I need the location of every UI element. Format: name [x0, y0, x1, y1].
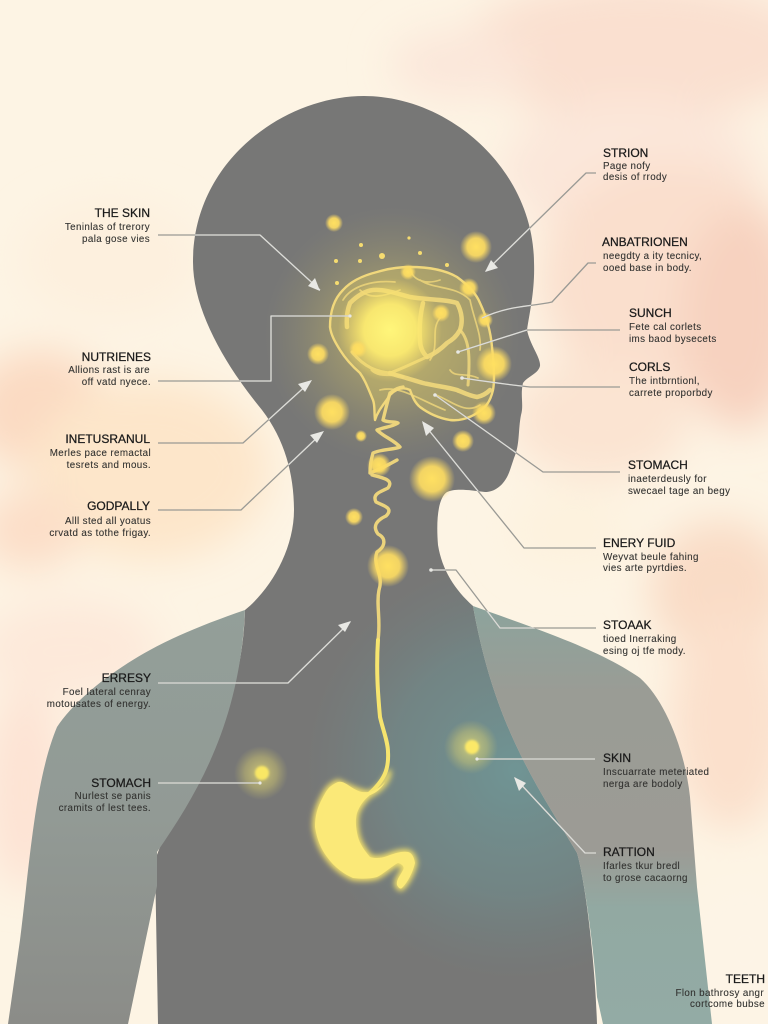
right arm — [473, 606, 712, 1024]
label: nutrienes: off vatd nyece. — [82, 377, 151, 388]
arm energy point left — [234, 746, 288, 800]
label: erresy: Foel Iateral cenray — [63, 687, 151, 698]
label: nutrienes — [68, 350, 151, 388]
label: teeth: Flon bathrosy angr — [675, 988, 764, 999]
label: corls: The intbrntionl, — [629, 376, 700, 387]
label: inetusranul: INETUSRANUL — [65, 432, 150, 446]
label: sunch: Fete cal corlets — [629, 322, 702, 333]
label: skin: Inscuarrate meteriated — [603, 767, 709, 778]
label: strion: desis of rrody — [603, 172, 667, 183]
label: skin — [603, 751, 709, 790]
label: stomach right: inaeterdeusly for — [628, 474, 707, 485]
label: sunch — [629, 306, 717, 345]
label: godpally — [49, 499, 151, 539]
left arm — [8, 610, 245, 1024]
label: stomach right — [628, 458, 730, 497]
label: godpally: Alll sted all yoatus — [65, 516, 151, 527]
label: teeth: cortcome bubse — [690, 999, 765, 1010]
label: erresy — [47, 671, 151, 710]
label: inetusranul — [50, 432, 151, 471]
arrowheads — [258, 260, 526, 791]
label: enery fuid: Weyvat beule fahing — [603, 552, 699, 563]
label: inetusranul: tesrets and mous. — [67, 460, 151, 471]
label: anbatrionen: neegdty a ity tecnicy, — [603, 251, 702, 262]
label: stoaak: STOAAK — [603, 618, 651, 632]
label: ration: RATTION — [603, 845, 655, 859]
leader lines on background — [158, 173, 620, 853]
label: nutrienes: NUTRIENES — [82, 350, 151, 364]
label: erresy: motousates of energy. — [47, 699, 151, 710]
glow around brain — [290, 233, 494, 438]
brain folds — [347, 290, 462, 357]
label: ration: Ifarles tkur bredl — [603, 861, 680, 872]
label: teeth: TEETH — [726, 972, 765, 986]
label: godpally: crvatd as tothe frigay. — [49, 528, 151, 539]
label: sunch: ims baod bysecets — [629, 334, 717, 345]
label: the skin: Teninlas of trerory — [65, 222, 150, 233]
label: anbatrionen: ooed base in body. — [603, 263, 692, 274]
label: godpally: GODPALLY — [87, 499, 150, 513]
stomach glow — [315, 772, 415, 889]
label: the skin: THE SKIN — [95, 206, 150, 220]
brain network — [330, 267, 494, 640]
label: strion: STRION — [603, 146, 648, 160]
label: stomach left: STOMACH — [91, 776, 151, 790]
label: corls: CORLS — [629, 360, 670, 374]
digestive tract and stomach — [315, 640, 415, 889]
label: enery fuid: vies arte pyrtdies. — [603, 563, 687, 574]
teal torso shading — [362, 606, 590, 926]
label: ration: to grose cacaorng — [603, 873, 688, 884]
label: corls — [629, 360, 713, 399]
label: stoaak: esing oj tfe mody. — [603, 646, 686, 657]
label: stomach left: cramits of lest tees. — [59, 803, 151, 814]
label: ration — [603, 845, 688, 884]
stomach — [315, 782, 415, 889]
label: stomach right: swecael tage an begy — [628, 486, 730, 497]
label: erresy: ERRESY — [102, 671, 151, 685]
label: stomach left — [59, 776, 151, 814]
glowing energy orbs — [307, 214, 512, 587]
esophagus — [370, 640, 388, 793]
brain stem — [370, 387, 403, 640]
label: stoaak: tioed Inerraking — [603, 634, 677, 645]
label: stomach right: STOMACH — [628, 458, 688, 472]
label: anbatrionen — [602, 235, 702, 274]
arm energy point right — [444, 720, 498, 774]
label: strion: Page nofy — [603, 161, 651, 172]
label: inetusranul: Merles pace remactal — [50, 448, 151, 459]
label: the skin — [65, 206, 150, 245]
label: strion — [603, 146, 667, 183]
head and torso — [155, 96, 597, 1024]
label: sunch: SUNCH — [629, 306, 672, 320]
leader lines over body — [158, 228, 596, 854]
label: stomach left: Nurlest se panis — [75, 791, 151, 802]
label: teeth — [675, 972, 765, 1010]
label: nutrienes: Allions rast is are — [68, 365, 150, 376]
central brain core — [338, 278, 442, 382]
label: the skin: pala gose vies — [82, 234, 150, 245]
label: anbatrionen: ANBATRIONEN — [602, 235, 688, 249]
label: skin: SKIN — [603, 751, 631, 765]
label: enery fuid: ENERY FUID — [603, 536, 676, 550]
label: stoaak — [603, 618, 686, 657]
brain outline — [330, 267, 494, 420]
label: corls: carrete proporbdy — [629, 388, 713, 399]
label: enery fuid — [603, 536, 699, 574]
label: skin: nerga are bodoly — [603, 779, 683, 790]
